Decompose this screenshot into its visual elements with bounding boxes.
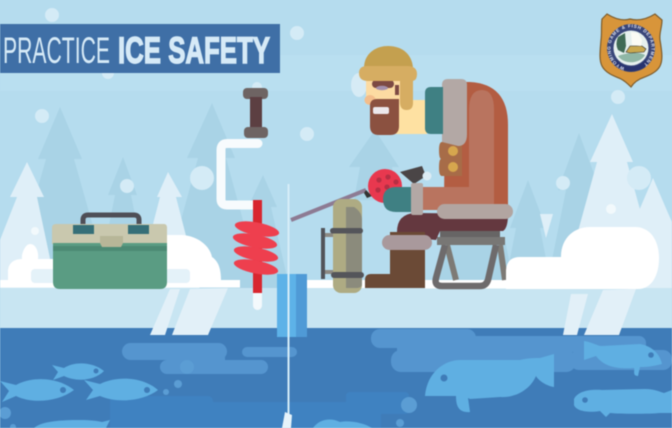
hair sideburn xyxy=(395,85,399,95)
auger blades xyxy=(232,218,280,278)
fish bottom left xyxy=(34,420,110,428)
logo badge: WYOMING GAME & FISH DEPARTMENT xyxy=(606,24,656,71)
eye xyxy=(376,86,388,90)
latch xyxy=(100,236,123,247)
nose xyxy=(364,95,376,105)
water light shapes xyxy=(122,329,672,374)
bracket xyxy=(321,228,325,279)
fish school left xyxy=(0,363,372,428)
fish bottom middle xyxy=(313,420,372,428)
fishing rod xyxy=(291,190,366,220)
water xyxy=(0,328,672,428)
mitten xyxy=(383,187,412,212)
fish middle xyxy=(84,379,158,400)
title banner: PRACTICE xyxy=(3,30,110,71)
background sky xyxy=(0,0,672,290)
snowflakes xyxy=(35,8,651,193)
neck xyxy=(395,100,427,134)
band xyxy=(53,246,167,251)
coat sleeve xyxy=(423,187,494,210)
right fish upper xyxy=(584,341,662,376)
big fish xyxy=(425,354,554,412)
right fish lower xyxy=(574,389,672,417)
ice auger xyxy=(221,88,280,310)
beard xyxy=(370,99,399,135)
pocket flap with buttons xyxy=(439,142,462,176)
clasps xyxy=(73,225,94,234)
handle xyxy=(83,215,139,226)
breath puff xyxy=(351,73,367,97)
straps xyxy=(330,228,363,234)
foreground pale trees xyxy=(0,114,672,296)
ice streaks xyxy=(150,288,636,335)
chair xyxy=(436,231,505,286)
fisherman xyxy=(351,46,513,288)
fishing sled bag xyxy=(321,199,364,293)
fish left xyxy=(0,379,74,402)
teeth xyxy=(373,107,389,114)
hat xyxy=(359,46,417,110)
left snow mounds xyxy=(0,235,240,288)
bubbles xyxy=(0,360,417,428)
logo badge xyxy=(598,12,664,88)
bag body xyxy=(333,199,362,293)
seat cushion xyxy=(437,204,513,219)
ice surface xyxy=(0,288,672,329)
auger crank rod xyxy=(221,144,258,205)
boot xyxy=(365,232,425,288)
ice edge snow xyxy=(307,280,506,288)
reel xyxy=(364,166,432,203)
inner collar teal xyxy=(425,87,443,134)
boot cuff xyxy=(382,235,432,250)
body xyxy=(53,243,167,289)
tackle box xyxy=(52,215,167,289)
lid xyxy=(52,224,167,244)
lure xyxy=(282,412,292,428)
auger tip xyxy=(253,285,262,310)
auger shaft xyxy=(253,200,262,293)
fishing line xyxy=(288,184,290,416)
deep water shapes xyxy=(110,392,409,428)
background trees xyxy=(9,103,612,290)
fur collar xyxy=(442,79,467,146)
coat back xyxy=(444,82,508,208)
ice fishing hole xyxy=(277,274,307,337)
fish small xyxy=(52,363,104,380)
trousers xyxy=(397,213,508,240)
auger handle xyxy=(243,88,268,138)
title banner xyxy=(0,24,280,73)
mitten cuff xyxy=(411,183,423,215)
title banner: ICE SAFETY xyxy=(118,30,270,71)
eyebrow xyxy=(372,80,394,88)
coat front panel xyxy=(469,90,494,206)
face xyxy=(366,78,400,104)
right snow mound xyxy=(506,227,659,289)
